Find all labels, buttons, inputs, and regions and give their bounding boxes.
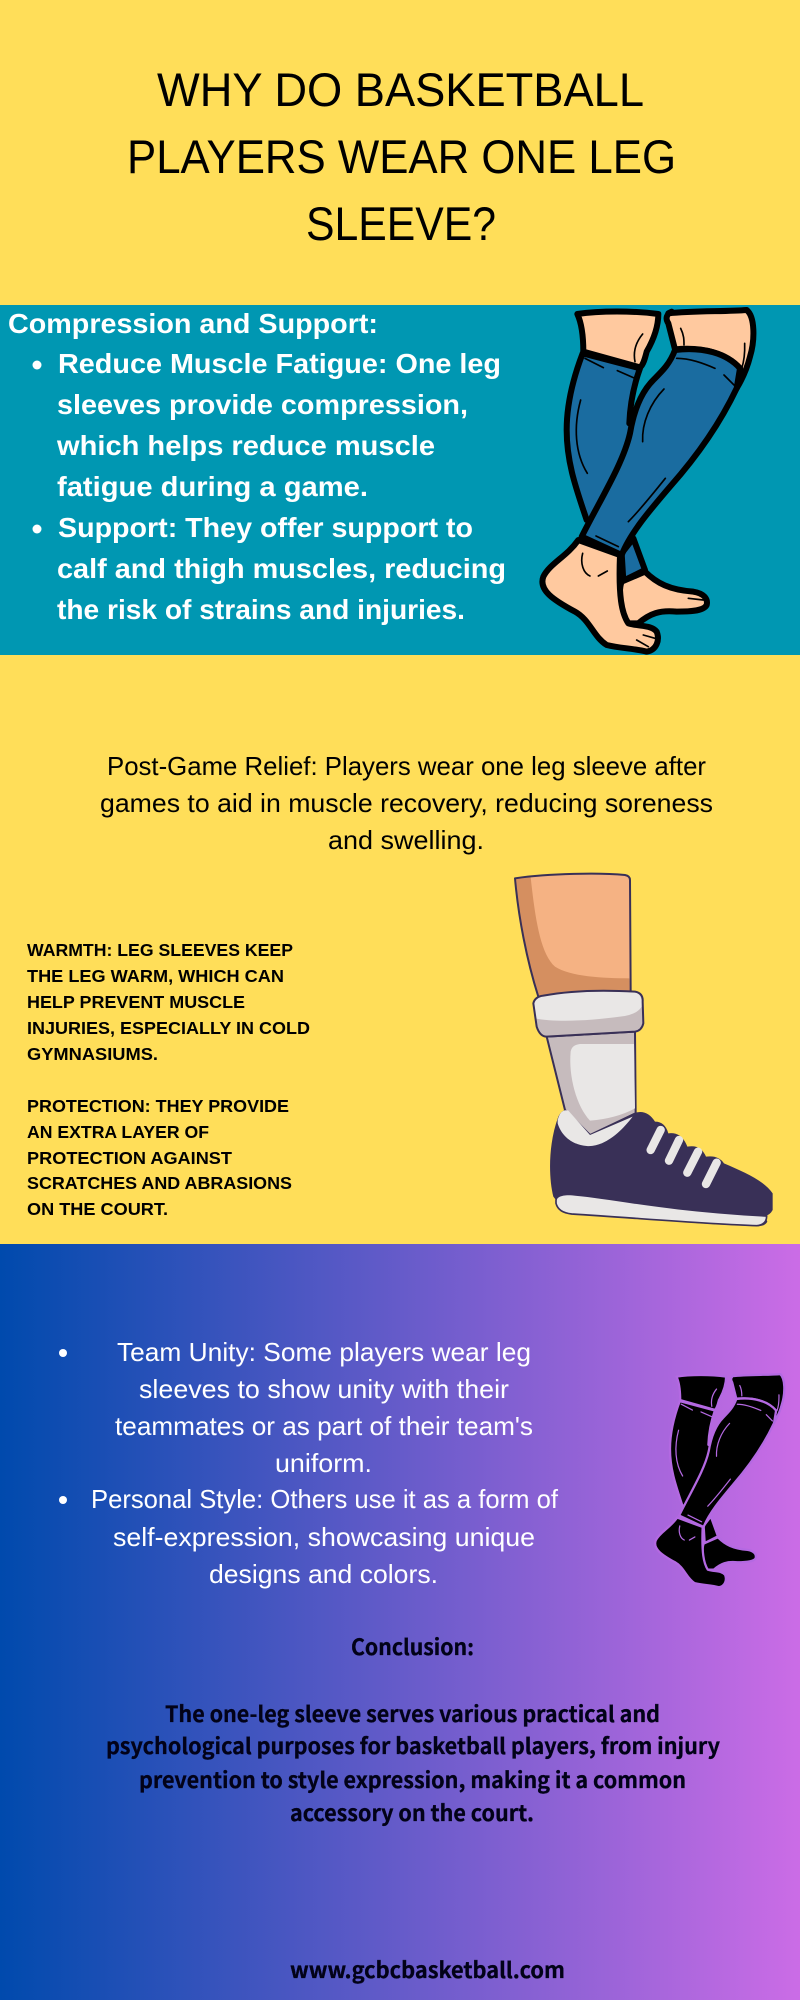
text block: post-game relief: games to aid in muscle recovery, reducing soreness bbox=[100, 788, 713, 818]
bullet text: reduce muscle fatigue: Reduce Muscle Fatigue: One leg bbox=[58, 348, 501, 379]
title: PLAYERS WEAR ONE LEG bbox=[127, 130, 676, 183]
text block: conclusion: accessory on the court. bbox=[290, 1796, 534, 1828]
text block: conclusion: The one-leg sleeve serves various practical and bbox=[165, 1697, 660, 1729]
text block: warmth bbox=[27, 940, 310, 1064]
text block: protection: PROTECTION: THEY PROVIDE bbox=[27, 1096, 289, 1116]
bullet text: team unity: sleeves to show unity with their bbox=[139, 1374, 509, 1404]
panel: compression and support bbox=[0, 305, 800, 655]
website url: www.gcbcbasketball.com bbox=[290, 1953, 565, 1985]
text block: warmth: WARMTH: LEG SLEEVES KEEP bbox=[27, 940, 293, 960]
bullet text: team unity: teammates or as part of their team's bbox=[115, 1411, 533, 1441]
text block: warmth: INJURIES, ESPECIALLY IN COLD bbox=[27, 1018, 310, 1038]
text block: conclusion bbox=[106, 1697, 720, 1828]
panel: title bbox=[0, 0, 800, 305]
bullet text: support: calf and thigh muscles, reducing bbox=[57, 553, 506, 584]
text block: post-game relief bbox=[100, 751, 713, 855]
bullet text: team unity: Team Unity: Some players wear leg bbox=[117, 1337, 531, 1367]
bullet text: team unity: uniform. bbox=[275, 1448, 372, 1478]
bullet text: support bbox=[32, 512, 506, 625]
text block: protection: ON THE COURT. bbox=[27, 1199, 168, 1219]
heading: conclusion: Conclusion: bbox=[351, 1630, 474, 1662]
text block: warmth: HELP PREVENT MUSCLE bbox=[27, 992, 245, 1012]
bullet text: support: Support: They offer support to bbox=[58, 512, 473, 543]
text block: protection: SCRATCHES AND ABRASIONS bbox=[27, 1173, 292, 1193]
panel: post-game relief, warmth and protection bbox=[0, 655, 800, 1244]
icon: blue leg sleeves bbox=[542, 310, 753, 652]
heading: compression and support: Compression and Support: bbox=[8, 308, 378, 339]
text block: warmth: THE LEG WARM, WHICH CAN bbox=[27, 966, 284, 986]
title bbox=[127, 63, 676, 250]
bullet text: personal style: self-expression, showcasing unique bbox=[113, 1522, 535, 1552]
text block: protection: AN EXTRA LAYER OF bbox=[27, 1122, 209, 1142]
text block: post-game relief: Post-Game Relief: Players wear one leg sleeve after bbox=[107, 751, 706, 781]
text block: conclusion: prevention to style expression, making it a common bbox=[139, 1763, 686, 1795]
bullet text: reduce muscle fatigue: sleeves provide compression, bbox=[57, 389, 468, 420]
bullet text: personal style bbox=[59, 1484, 559, 1589]
title: SLEEVE? bbox=[306, 197, 496, 250]
bullet text: support: the risk of strains and injuries. bbox=[57, 594, 465, 625]
bullet text: reduce muscle fatigue: which helps reduce muscle bbox=[56, 430, 435, 461]
text block: post-game relief: and swelling. bbox=[328, 825, 484, 855]
panel: team unity, style and conclusion bbox=[0, 1244, 800, 2000]
text block: protection bbox=[27, 1096, 292, 1219]
bullet text: personal style: designs and colors. bbox=[209, 1559, 438, 1589]
title: WHY DO BASKETBALL bbox=[157, 63, 644, 116]
icon: black leg sleeves silhouette bbox=[655, 1374, 784, 1587]
bullet text: reduce muscle fatigue bbox=[32, 348, 501, 502]
bullet text: team unity bbox=[59, 1337, 533, 1478]
bullet text: personal style: Personal Style: Others use it as a form of bbox=[91, 1484, 559, 1514]
text block: protection: PROTECTION AGAINST bbox=[27, 1148, 232, 1168]
bullet text: reduce muscle fatigue: fatigue during a game. bbox=[57, 471, 368, 502]
icon: leg with sock and sneaker bbox=[515, 874, 773, 1226]
text block: warmth: GYMNASIUMS. bbox=[27, 1044, 158, 1064]
text block: conclusion: psychological purposes for basketball players, from injury bbox=[106, 1729, 720, 1761]
